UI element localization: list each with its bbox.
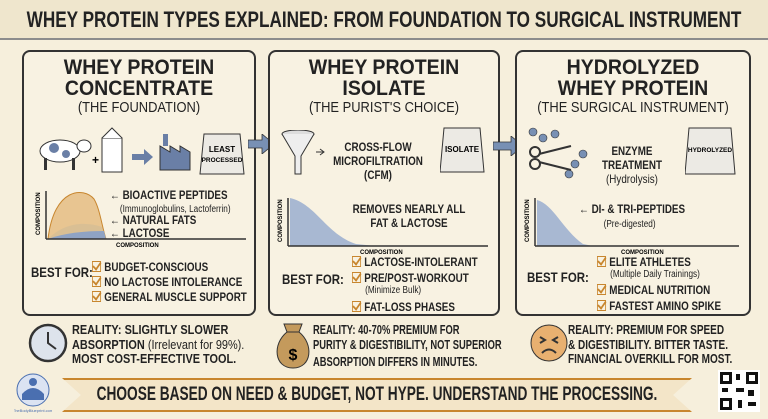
label: removes fat bbox=[353, 202, 466, 230]
reality: isolate: REALITY: 40-70% PREMIUM FOR bbox=[313, 322, 459, 337]
arrow 2 bbox=[493, 136, 515, 156]
labels: composition: (Immunoglobulins, Lactoferrin) bbox=[120, 204, 231, 215]
reality: concentrate: ABSORPTION (Irrelevant for 99%). bbox=[72, 336, 244, 352]
reality: concentrate: MOST COST-EFFECTIVE TOOL. bbox=[72, 351, 236, 366]
icon: money bag bbox=[276, 324, 310, 368]
QR code bbox=[718, 370, 760, 412]
labels: composition: ← BIOACTIVE PEPTIDES bbox=[110, 188, 228, 202]
reality: hydrolyzed: REALITY: PREMIUM FOR SPEED bbox=[568, 322, 724, 337]
heading: concentrate bbox=[64, 56, 214, 100]
panel: isolate: FAT-LOSS PHASES bbox=[364, 300, 455, 314]
reality: hydrolyzed: FINANCIAL OVERKILL FOR MOST. bbox=[568, 351, 732, 366]
label: removes fat: FAT & LACTOSE bbox=[370, 216, 448, 230]
panel: hydrolyzed: ELITE ATHLETES bbox=[609, 255, 691, 269]
icon: isolate bag: ISOLATE bbox=[445, 145, 480, 154]
heading: hydrolyzed bbox=[558, 56, 708, 100]
chart: hydrolyzed bbox=[524, 198, 739, 256]
reality: concentrate: REALITY: SLIGHTLY SLOWER bbox=[72, 322, 228, 337]
panel: concentrate: NO LACTOSE INTOLERANCE bbox=[104, 275, 242, 289]
text: enzyme: TREATMENT bbox=[602, 158, 662, 172]
arrow 1 bbox=[248, 134, 268, 154]
text: CFM: CROSS-FLOW bbox=[344, 140, 412, 154]
panel: isolate: PRE/POST-WORKOUT bbox=[364, 271, 469, 285]
heading: hydrolyzed: WHEY PROTEIN bbox=[558, 77, 708, 100]
banner: CHOOSE BASED ON NEED & BUDGET, NOT HYPE. UNDERSTAND THE PROCESSING. bbox=[97, 384, 657, 405]
reality: hydrolyzed: & DIGESTIBILITY. BITTER TASTE. bbox=[568, 336, 728, 352]
reality: isolate: ABSORPTION DIFFERS IN MINUTES. bbox=[313, 354, 477, 369]
text: enzyme: ENZYME bbox=[611, 144, 652, 158]
icon row: cow, milk, factory, bag: PROCESSED bbox=[202, 157, 243, 164]
panel: concentrate bbox=[22, 50, 256, 316]
icon row: cow, milk, factory, bag bbox=[40, 127, 244, 174]
reality: concentrate bbox=[72, 322, 244, 366]
panel: hydrolyzed: (Multiple Daily Trainings) bbox=[610, 269, 700, 280]
heading: hydrolyzed: HYDROLYZED bbox=[567, 56, 699, 79]
heading: isolate bbox=[308, 56, 459, 100]
icon: face bbox=[530, 324, 568, 362]
icon: money bag: $ bbox=[289, 347, 298, 364]
icon: clock bbox=[28, 324, 68, 362]
chart: isolate: COMPOSITION bbox=[278, 199, 284, 242]
label: di- & tri-peptides: ← DI- & TRI-PEPTIDES bbox=[579, 202, 685, 216]
panel: isolate: (THE PURIST'S CHOICE) bbox=[309, 99, 459, 116]
icon: funnel bbox=[282, 130, 325, 174]
chart: concentrate composition: COMPOSITION bbox=[116, 243, 159, 249]
text: CFM: MICROFILTRATION bbox=[333, 154, 423, 168]
subheading: (THE FOUNDATION) bbox=[78, 99, 200, 116]
heading: concentrate: WHEY PROTEIN bbox=[64, 56, 214, 79]
icon: hydrolyzed bag bbox=[685, 128, 736, 174]
title: WHEY PROTEIN TYPES EXPLAINED: FROM FOUNDATION TO SURGICAL INSTRUMENT bbox=[27, 7, 741, 32]
panel: hydrolyzed: MEDICAL NUTRITION bbox=[609, 283, 710, 297]
text: CFM: (CFM) bbox=[364, 168, 392, 182]
panel: isolate: LACTOSE-INTOLERANT bbox=[364, 255, 478, 269]
panel: isolate: (Minimize Bulk) bbox=[365, 285, 421, 296]
reality: isolate: PURITY & DIGESTIBILITY, NOT SUPERIOR bbox=[313, 336, 502, 352]
reality: isolate bbox=[313, 322, 502, 369]
icon: scissors and peptides bbox=[528, 128, 588, 178]
panel: concentrate: ← NATURAL FATS bbox=[110, 213, 196, 227]
panel: isolate bbox=[268, 50, 500, 316]
icon row: cow, milk, factory, bag: + bbox=[92, 153, 99, 167]
heading: isolate: WHEY PROTEIN bbox=[309, 56, 459, 79]
label: di- & tri-peptides bbox=[579, 202, 685, 230]
chart: isolate: COMPOSITION bbox=[360, 250, 403, 256]
label: di- & tri-peptides: (Pre-digested) bbox=[604, 219, 656, 230]
icon: hydrolyzed bag: HYDROLYZED bbox=[688, 147, 732, 154]
panel: concentrate: BUDGET-CONSCIOUS bbox=[104, 260, 208, 274]
text: enzyme: (Hydrolysis) bbox=[606, 172, 658, 186]
best for: hydrolyzed: BEST FOR: bbox=[527, 269, 589, 285]
icon row: cow, milk, factory, bag: LEAST bbox=[209, 145, 235, 154]
text: CFM bbox=[333, 140, 423, 182]
chart: hydrolyzed: COMPOSITION bbox=[525, 199, 531, 242]
best for: concentrate: BEST FOR: bbox=[31, 264, 93, 280]
label: removes fat: REMOVES NEARLY ALL bbox=[353, 202, 465, 216]
panel: concentrate: GENERAL MUSCLE SUPPORT bbox=[104, 290, 247, 304]
panel: concentrate: ← LACTOSE bbox=[110, 226, 169, 240]
panel: hydrolyzed: FASTEST AMINO SPIKE bbox=[609, 299, 721, 313]
banner bbox=[62, 378, 692, 412]
text: enzyme bbox=[602, 144, 662, 186]
chart: isolate bbox=[278, 198, 488, 256]
chart: concentrate composition: COMPOSITION bbox=[36, 192, 42, 235]
heading: concentrate: CONCENTRATE bbox=[65, 77, 213, 100]
logo bbox=[14, 374, 52, 413]
panel: hydrolyzed bbox=[515, 50, 751, 316]
heading: isolate: ISOLATE bbox=[342, 77, 426, 100]
labels: composition bbox=[110, 188, 231, 215]
reality: hydrolyzed bbox=[568, 322, 732, 366]
chart: concentrate composition bbox=[36, 191, 246, 249]
best for: isolate: BEST FOR: bbox=[282, 271, 344, 287]
icon: isolate bag bbox=[440, 128, 484, 172]
chart: hydrolyzed: COMPOSITION bbox=[621, 250, 664, 256]
panel: hydrolyzed: (THE SURGICAL INSTRUMENT) bbox=[537, 99, 729, 116]
title bbox=[0, 0, 768, 40]
